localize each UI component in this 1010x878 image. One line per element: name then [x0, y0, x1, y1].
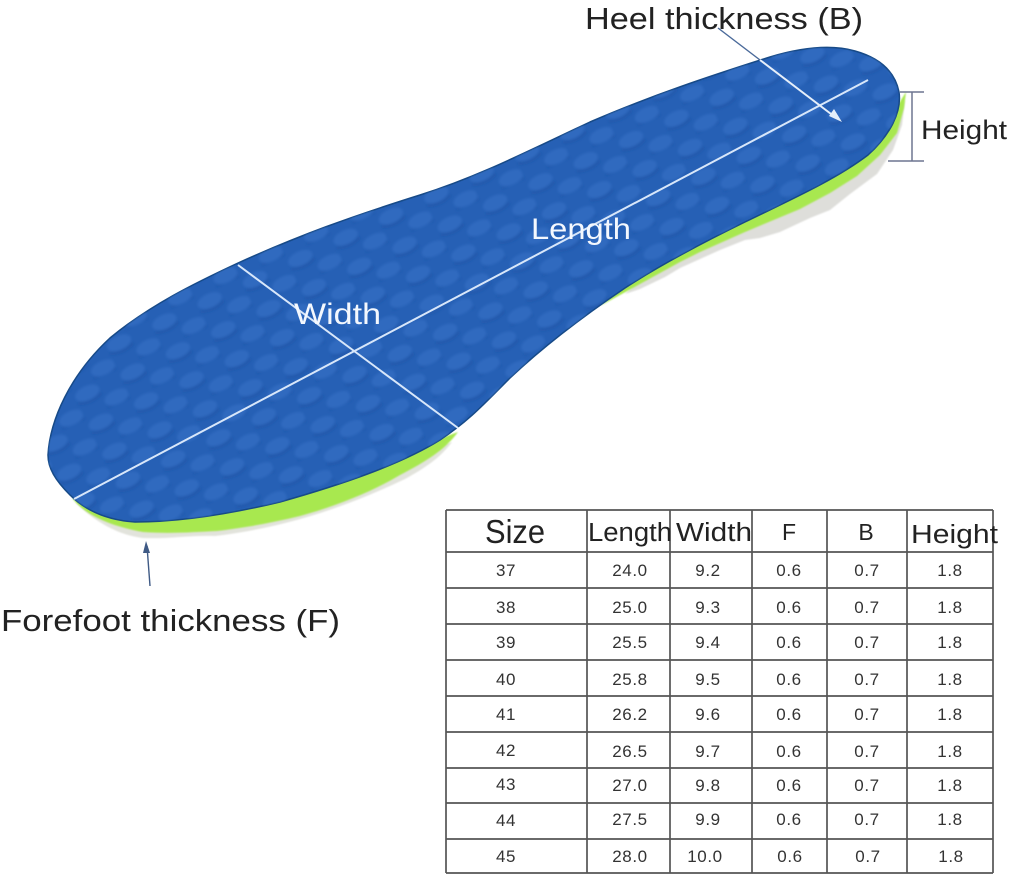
table header: B	[858, 519, 874, 545]
table rows: 0.7	[854, 705, 880, 724]
table rows: 1.8	[937, 561, 963, 580]
table rows: 43	[496, 775, 516, 794]
table rows: 1.8	[938, 847, 964, 866]
table rows: 38	[496, 598, 516, 617]
table rows: 0.6	[776, 561, 802, 580]
table rows: 0.7	[854, 670, 880, 689]
table rows: 40	[496, 670, 516, 689]
table rows: 0.6	[776, 670, 802, 689]
table rows: 9.7	[695, 742, 721, 761]
size table	[446, 510, 998, 873]
table rows: 1.8	[937, 776, 963, 795]
forefoot thickness arrow	[143, 541, 150, 586]
table rows: 1.8	[937, 810, 963, 829]
table rows: 0.7	[855, 847, 881, 866]
table rows: 39	[496, 633, 516, 652]
table rows: 27.0	[612, 776, 648, 795]
table rows: 1.8	[937, 670, 963, 689]
table header: Width	[676, 519, 752, 547]
table rows: 26.5	[612, 742, 648, 761]
table rows: 0.6	[776, 742, 802, 761]
table rows: 28.0	[612, 847, 648, 866]
table rows: 0.6	[776, 633, 802, 652]
table rows: 26.2	[612, 705, 648, 724]
length measurement line	[74, 80, 868, 499]
label: length: Length	[531, 213, 631, 246]
dimple texture	[40, 40, 910, 530]
foam sole layer: heel	[625, 100, 905, 294]
heel thickness arrow	[718, 28, 842, 122]
insole illustration	[40, 40, 910, 538]
table header: F	[782, 519, 796, 545]
table rows: 0.6	[777, 847, 803, 866]
table rows: 24.0	[612, 561, 648, 580]
heel thickness label: Heel thickness (B)	[585, 1, 863, 36]
green layer: forefoot	[72, 432, 458, 533]
table rows: 25.0	[612, 598, 648, 617]
height label: Height	[921, 115, 1008, 145]
blue top surface	[48, 47, 899, 522]
green layer: heel	[600, 92, 906, 306]
table header	[485, 513, 998, 550]
table rows: 9.6	[695, 705, 721, 724]
table rows: 45	[496, 847, 516, 866]
table rows: 9.2	[695, 561, 721, 580]
table header: Length	[588, 519, 672, 547]
table rows: 0.7	[854, 742, 880, 761]
foam sole layer: forefoot	[75, 442, 452, 538]
table rows: 27.5	[612, 810, 648, 829]
table grid	[446, 510, 993, 873]
table rows: 9.3	[695, 598, 721, 617]
table rows: 0.7	[854, 776, 880, 795]
table rows: 9.8	[695, 776, 721, 795]
table rows: 0.7	[854, 598, 880, 617]
table rows: 1.8	[937, 705, 963, 724]
table rows: 41	[496, 705, 516, 724]
height bracket	[888, 92, 924, 161]
table rows: 0.6	[776, 598, 802, 617]
table rows: 10.0	[687, 847, 723, 866]
table rows: 0.7	[854, 810, 880, 829]
table header: Size	[485, 513, 545, 550]
table rows: 1.8	[937, 598, 963, 617]
forefoot thickness label: Forefoot thickness (F)	[1, 603, 340, 638]
table rows: 0.6	[776, 705, 802, 724]
table rows: 0.7	[854, 561, 880, 580]
table rows: 9.5	[695, 670, 721, 689]
table rows	[496, 561, 964, 866]
table rows: 0.6	[776, 810, 802, 829]
table rows: 44	[496, 811, 516, 830]
table rows: 9.9	[695, 810, 721, 829]
table rows: 1.8	[937, 633, 963, 652]
width measurement line	[238, 265, 458, 428]
table rows: 37	[496, 561, 516, 580]
table rows: 1.8	[937, 742, 963, 761]
table header: Height	[911, 521, 998, 549]
table rows: 0.7	[854, 633, 880, 652]
label: width: Width	[294, 298, 381, 331]
table rows: 25.8	[612, 670, 648, 689]
table rows: 0.6	[776, 776, 802, 795]
table rows: 25.5	[612, 633, 648, 652]
table rows: 9.4	[695, 633, 721, 652]
table rows: 42	[496, 741, 516, 760]
